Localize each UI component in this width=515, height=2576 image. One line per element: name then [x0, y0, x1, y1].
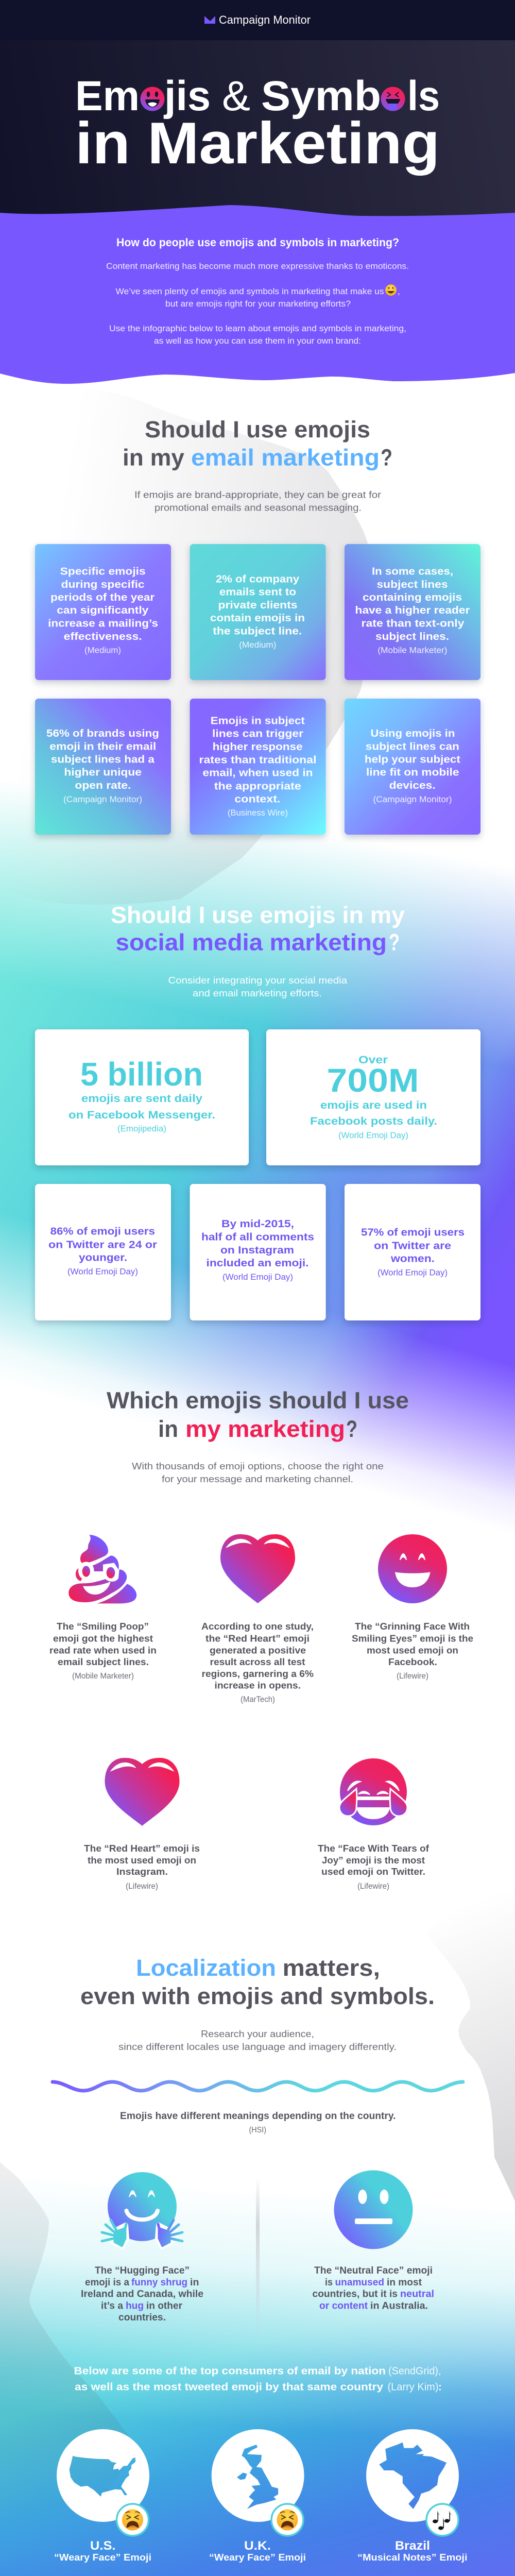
- panel: U.S.: [52, 2424, 154, 2563]
- text block: tears of joy on Twitter: (Lifewire): [357, 1882, 389, 1891]
- background: grey blob behind email section: [0, 384, 368, 905]
- card: 56% of brands: (Campaign Monitor): [63, 795, 142, 804]
- card: 5 billion: (Emojipedia): [117, 1124, 166, 1133]
- card: subject line fit on mobile: (Campaign Monitor): [373, 795, 452, 804]
- text block: hugging face: Ireland and Canada, while: [81, 2289, 203, 2300]
- text block: hugging face: emoji is a: [85, 2277, 129, 2288]
- title: Symb: [261, 73, 381, 120]
- text block: red heart study: According to one study,: [201, 1621, 314, 1632]
- text block: meanings by country: (HSI): [249, 2126, 266, 2134]
- card: half of all comments on Instagram: [190, 1184, 326, 1320]
- text block: social media intro: Consider integrating your social media: [168, 975, 348, 986]
- icon: face with tears of joy: [339, 1758, 407, 1825]
- heading: localization: [80, 1955, 435, 2009]
- text block: neutral face: in Australia.: [370, 2301, 428, 2311]
- text block: red heart on Instagram: Instagram.: [116, 1866, 168, 1877]
- card: specific emojis: during specific: [61, 579, 145, 590]
- text block: red heart study: generated a positive: [210, 1645, 306, 1656]
- card: higher response rates: (Business Wire): [228, 808, 288, 818]
- card: 57% of emoji users: 57% of emoji users: [361, 1226, 465, 1239]
- card: half of all comments on Instagram: on Instagram: [220, 1244, 294, 1256]
- background: country section gradient: [0, 2164, 515, 2576]
- text block: neutral face: [312, 2265, 434, 2311]
- card: 5 billion: [35, 1029, 249, 1165]
- card: specific emojis: increase a mailing’s: [48, 617, 158, 630]
- card: higher reader rate: (Mobile Marketer): [377, 646, 447, 655]
- text block: tears of joy on Twitter: used emoji on Twitter.: [321, 1866, 425, 1877]
- icon: smiling emoji o: [140, 87, 165, 111]
- text block: smiling poop: [49, 1621, 157, 1681]
- text block: grinning face: Facebook.: [388, 1656, 437, 1667]
- heading: email marketing: Should I use emojis: [145, 416, 370, 443]
- card: higher reader rate: [345, 544, 480, 680]
- heading: localization: matters,: [282, 1955, 380, 1981]
- heading: which emojis: ?: [346, 1416, 357, 1442]
- text block: top consumers of email: as well as the most tweeted emoji by that same country: [75, 2381, 384, 2393]
- card: 5 billion: emojis are sent daily: [81, 1093, 202, 1105]
- text block: top consumers of email: :: [438, 2381, 442, 2393]
- panel: U.S.: U.S.: [90, 2539, 115, 2553]
- text block: neutral face: countries, but it is: [312, 2289, 398, 2300]
- text block: grinning face: [352, 1621, 473, 1681]
- text block: neutral face: neutral: [400, 2289, 434, 2300]
- card: 56% of brands: 56% of brands using: [46, 727, 159, 739]
- background: left blob in country section: [0, 2162, 129, 2535]
- text block: intro copy: ,: [398, 286, 400, 296]
- card: 86% of emoji users: on Twitter are 24 or: [48, 1239, 157, 1251]
- card: 700M: emojis are used in: [320, 1099, 427, 1111]
- text block: smiling poop: emoji got the highest: [53, 1633, 153, 1643]
- card: 700M: (World Emoji Day): [338, 1131, 408, 1140]
- heading: social media marketing: social media marketing: [115, 929, 387, 955]
- text block: red heart study: the “Red Heart” emoji: [205, 1633, 310, 1643]
- text block: red heart study: [201, 1621, 314, 1704]
- text block: red heart on Instagram: (Lifewire): [126, 1882, 158, 1891]
- panel: Brazil: “Musical Notes” Emoji: [357, 2552, 468, 2563]
- card: 2% of company emails: (Medium): [239, 640, 276, 650]
- icon: smiley emoji: [385, 284, 397, 296]
- heading: which emojis: Which emojis should I use: [107, 1387, 409, 1414]
- card: higher response rates: Emojis in subject: [211, 715, 305, 726]
- text block: social media intro: and email marketing efforts.: [193, 988, 322, 998]
- heading: email marketing: email marketing: [191, 444, 380, 471]
- text block: grinning face: most used emoji on: [367, 1645, 458, 1656]
- text block: grinning face: Smiling Eyes” emoji is the: [352, 1633, 473, 1643]
- icon: envelope mark: [204, 16, 215, 24]
- title: &: [222, 73, 250, 120]
- card: 2% of company emails: emails sent to: [219, 586, 296, 598]
- text block: top consumers of email: (Larry Kim): [387, 2381, 439, 2393]
- panel: intro on purple wave: [0, 205, 515, 384]
- text block: tears of joy on Twitter: [318, 1843, 430, 1891]
- hand: left: [102, 2220, 127, 2247]
- map: Brazil: [366, 2429, 459, 2522]
- text block: smiling poop: read rate when used in: [49, 1645, 157, 1656]
- card: higher response rates: rates than traditional: [199, 754, 316, 766]
- card: higher response rates: context.: [234, 793, 280, 805]
- card: specific emojis: Specific emojis: [60, 566, 146, 577]
- card: 5 billion: 5 billion: [80, 1056, 203, 1093]
- text block: red heart on Instagram: the most used emoji on: [88, 1855, 196, 1866]
- card: 2% of company emails: [190, 544, 326, 680]
- card: 57% of emoji users: women.: [390, 1253, 435, 1264]
- text block: red heart on Instagram: [84, 1843, 200, 1891]
- text block: smiling poop: email subject lines.: [58, 1656, 149, 1667]
- panel: U.K.: [210, 2429, 305, 2563]
- panel: U.K.: “Weary Face” Emoji: [209, 2552, 306, 2563]
- card: higher response rates: lines can trigger: [212, 727, 303, 740]
- text block: email intro: [134, 489, 381, 513]
- card: 2% of company emails: 2% of company: [216, 573, 300, 585]
- text block: intro copy: Use the infographic below to learn about emojis and symbols in marketing,: [109, 324, 406, 333]
- map: United Kingdom: [211, 2429, 304, 2522]
- card: half of all comments on Instagram: half of all comments: [201, 1231, 314, 1243]
- text block: top consumers of email: [74, 2366, 442, 2393]
- text block: hugging face: countries.: [118, 2312, 166, 2323]
- card: half of all comments on Instagram: (World Emoji Day): [222, 1273, 293, 1282]
- text block: smiling poop: The “Smiling Poop”: [57, 1621, 149, 1632]
- text block: grinning face: The “Grinning Face With: [355, 1621, 470, 1632]
- badge: weary face: [271, 2504, 303, 2536]
- card: higher reader rate: rate than text-only: [362, 617, 465, 630]
- card: higher reader rate: subject lines.: [375, 631, 449, 642]
- heading: social media marketing: ?: [389, 929, 400, 955]
- card: specific emojis: can significantly: [57, 604, 149, 616]
- text block: tears of joy on Twitter: Joy” emoji is the most: [322, 1855, 425, 1866]
- card: 56% of brands: subject lines had a: [51, 753, 155, 766]
- heading: localization: Localization: [136, 1955, 276, 1981]
- card: 2% of company emails: contain emojis in: [210, 612, 305, 624]
- title: jis: [163, 73, 211, 120]
- text block: grinning face: (Lifewire): [397, 1672, 428, 1681]
- text block: intro copy: We’ve seen plenty of emojis and symbols in marketing that make us: [115, 286, 384, 296]
- title: Em: [75, 73, 140, 120]
- text block: which emojis intro: With thousands of emoji options, choose the right one: [132, 1461, 384, 1471]
- text block: neutral face: is: [325, 2277, 333, 2288]
- card: 700M: Over: [358, 1054, 388, 1066]
- card: 700M: [266, 1029, 480, 1165]
- text block: tears of joy on Twitter: The “Face With Tears of: [318, 1843, 430, 1854]
- card: 56% of brands: open rate.: [75, 779, 131, 791]
- text block: social media intro: [168, 975, 348, 998]
- card: 57% of emoji users: [345, 1184, 480, 1320]
- badge: musical notes: [426, 2504, 458, 2536]
- text block: top consumers of email: (SendGrid),: [388, 2366, 441, 2377]
- hand: right: [158, 2220, 182, 2247]
- panel: U.S.: “Weary Face” Emoji: [54, 2552, 151, 2563]
- card: higher reader rate: subject lines: [377, 579, 448, 590]
- card: 86% of emoji users: (World Emoji Day): [67, 1267, 138, 1277]
- card: 56% of brands: [35, 699, 171, 835]
- card: subject line fit on mobile: line fit on mobile: [366, 767, 459, 778]
- icon: neutral face: [334, 2170, 413, 2249]
- text block: email intro: promotional emails and seasonal messaging.: [154, 503, 362, 513]
- text block: meanings by country: [120, 2110, 396, 2134]
- card: subject line fit on mobile: devices.: [389, 779, 436, 791]
- text block: meanings by country: Emojis have different meanings depending on the country.: [120, 2110, 396, 2122]
- map: United States: [57, 2429, 149, 2522]
- text block: red heart study: result across all test: [210, 1656, 305, 1667]
- text block: neutral face: in most: [387, 2277, 422, 2288]
- title: in Marketing: [75, 111, 440, 176]
- text block: intro copy: [106, 261, 409, 346]
- icon: red heart: [220, 1534, 295, 1603]
- heading: which emojis: my marketing: [185, 1416, 345, 1442]
- heading: email marketing: ?: [381, 444, 392, 471]
- text block: hugging face: The “Hugging Face”: [95, 2265, 190, 2276]
- heading: how do people use emojis: How do people use emojis and symbols in marketing?: [116, 236, 399, 249]
- card: 5 billion: on Facebook Messenger.: [68, 1109, 215, 1121]
- card: specific emojis: periods of the year: [50, 591, 154, 603]
- card: specific emojis: effectiveness.: [64, 631, 142, 642]
- text block: hugging face: it’s a: [101, 2301, 123, 2311]
- title: ls: [407, 73, 440, 120]
- heading: social media marketing: Should I use emojis in my: [111, 902, 405, 928]
- heading: localization: even with emojis and symbols.: [80, 1983, 435, 2009]
- text block: intro copy: but are emojis right for your marketing efforts?: [165, 299, 351, 309]
- heading: social media marketing: [111, 902, 405, 955]
- panel: social media stat cards: [35, 1029, 480, 1320]
- card: subject line fit on mobile: help your subject: [365, 753, 460, 766]
- text block: hugging face: in other: [146, 2301, 183, 2311]
- card: higher reader rate: have a higher reader: [355, 604, 470, 616]
- text block: smiling poop: (Mobile Marketer): [72, 1672, 134, 1681]
- text block: localization intro: Research your audience,: [201, 2029, 314, 2039]
- text block: localization intro: [118, 2029, 397, 2052]
- card: 86% of emoji users: younger.: [79, 1252, 127, 1263]
- card: higher reader rate: In some cases,: [372, 566, 453, 577]
- text block: intro copy: as well as how you can use them in your own brand:: [154, 336, 361, 346]
- heading: which emojis: in: [158, 1416, 178, 1442]
- card: 2% of company emails: private clients: [218, 599, 298, 611]
- card: 56% of brands: emoji in their email: [49, 741, 156, 752]
- icon: tongue-out emoji o: [381, 87, 405, 111]
- card: subject line fit on mobile: Using emojis in: [370, 727, 455, 739]
- text block: red heart study: increase in opens.: [214, 1680, 301, 1691]
- card: half of all comments on Instagram: included an emoji.: [206, 1257, 309, 1269]
- card: 86% of emoji users: 86% of emoji users: [50, 1225, 155, 1238]
- card: higher reader rate: containing emojis: [363, 591, 462, 603]
- heading: email marketing: in my: [123, 444, 184, 471]
- card: 86% of emoji users: [35, 1184, 171, 1320]
- card: specific emojis: (Medium): [84, 646, 121, 655]
- heading: email marketing: [123, 416, 392, 471]
- card: 700M: 700M: [327, 1062, 419, 1099]
- text block: red heart on Instagram: The “Red Heart” emoji is: [84, 1843, 200, 1854]
- header band: [0, 0, 515, 227]
- card: higher response rates: email, when used in: [203, 767, 313, 779]
- icon: red heart small: [105, 1758, 179, 1826]
- squiggle divider: [53, 2082, 463, 2091]
- text block: hugging face: funny shrug: [131, 2277, 187, 2288]
- text block: red heart study: regions, garnering a 6%: [202, 1668, 314, 1679]
- icon: grinning face: [378, 1534, 447, 1603]
- text block: neutral face: The “Neutral Face” emoji: [314, 2265, 433, 2276]
- text block: red heart study: (MarTech): [241, 1695, 275, 1704]
- text block: which emojis intro: for your message and marketing channel.: [162, 1474, 353, 1484]
- icon: hugging face: [102, 2172, 182, 2247]
- logo: Campaign Monitor: Campaign Monitor: [219, 13, 311, 26]
- card: 56% of brands: higher unique: [64, 767, 142, 778]
- text block: hugging face: hug: [126, 2301, 144, 2311]
- background: social media gradient: [0, 721, 515, 1546]
- card: half of all comments on Instagram: By mid-2015,: [221, 1218, 294, 1230]
- card: 700M: Facebook posts daily.: [310, 1115, 437, 1127]
- background: grey blob behind localization section: [427, 1886, 515, 2201]
- panel: email marketing stat cards: [35, 544, 480, 835]
- card: 57% of emoji users: (World Emoji Day): [377, 1268, 448, 1278]
- title: [75, 73, 440, 176]
- panel: Brazil: [357, 2424, 468, 2563]
- card: higher response rates: the appropriate: [214, 780, 301, 792]
- card: higher response rates: higher response: [213, 741, 303, 753]
- panel: U.K.: U.K.: [244, 2539, 271, 2553]
- text block: neutral face: unamused: [335, 2277, 384, 2288]
- card: specific emojis: [35, 544, 171, 680]
- text block: intro copy: Content marketing has become much more expressive thanks to emoticons.: [106, 261, 409, 271]
- text block: hugging face: in: [190, 2277, 199, 2288]
- badge: weary face: [116, 2504, 148, 2536]
- text block: localization intro: since different locales use language and imagery differently.: [118, 2042, 397, 2052]
- card: 2% of company emails: the subject line.: [213, 625, 302, 637]
- card: higher response rates: [190, 699, 326, 835]
- card: subject line fit on mobile: subject lines can: [366, 741, 459, 752]
- text block: top consumers of email: Below are some of the top consumers of email by nation: [74, 2366, 386, 2377]
- heading: which emojis: [107, 1387, 409, 1442]
- icon: smiling poop: [68, 1535, 136, 1603]
- text block: which emojis intro: [132, 1461, 384, 1484]
- text block: neutral face: or content: [319, 2301, 368, 2311]
- card: 57% of emoji users: on Twitter are: [374, 1240, 451, 1252]
- text block: email intro: If emojis are brand-appropriate, they can be great for: [134, 489, 381, 500]
- panel: Brazil: Brazil: [395, 2539, 430, 2553]
- card: subject line fit on mobile: [345, 699, 480, 835]
- text block: hugging face: [81, 2265, 203, 2323]
